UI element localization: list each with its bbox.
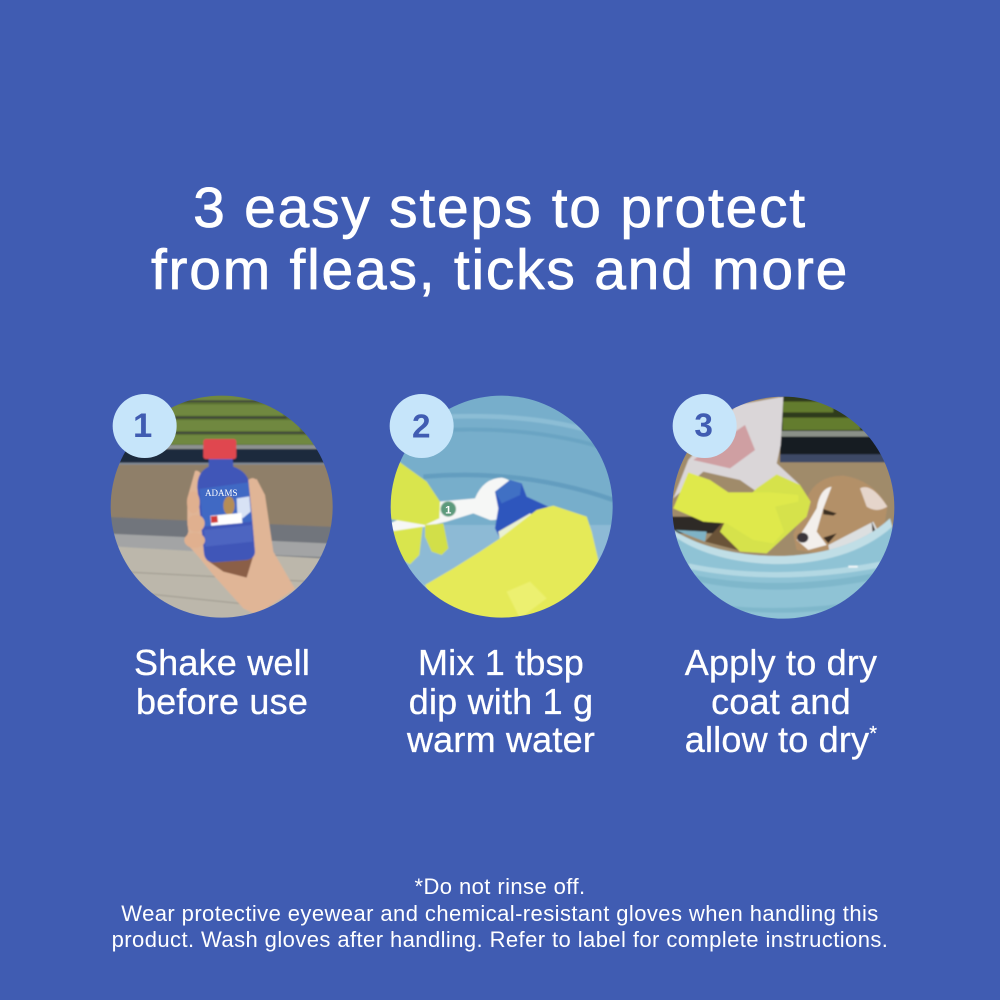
deck [111, 516, 331, 559]
step 2 caption: dip with 1 g [409, 680, 593, 722]
number badge 3: 3 [694, 408, 713, 445]
step 3 caption: Apply to dry [685, 642, 877, 683]
number badge 1 [113, 394, 177, 458]
number badge 1: 1 [133, 407, 152, 445]
number badge 2: 2 [412, 408, 431, 445]
bottle neck [495, 480, 548, 538]
title: from fleas, ticks and more [151, 238, 849, 302]
panel: step 2 photo [390, 394, 613, 618]
sponge [720, 474, 811, 553]
footnote: product. Wash gloves after handling. Refer to label for complete instructions. [112, 927, 888, 952]
step 3 caption: coat and [711, 680, 851, 722]
scoop [390, 478, 514, 534]
foliage [171, 396, 314, 445]
step 1 caption [134, 642, 310, 722]
panel: step 1 photo [110, 394, 333, 618]
panel: step 3 photo [672, 394, 894, 619]
title [151, 176, 849, 302]
right glove [425, 506, 598, 625]
left glove [390, 462, 440, 525]
number badge 3 [673, 394, 737, 458]
step 2 caption: warm water [407, 719, 595, 760]
label text: ADAMS [205, 488, 237, 498]
bottle [197, 458, 255, 562]
glove [673, 472, 798, 543]
footnote: Wear protective eyewear and chemical-resistant gloves when handling this [121, 900, 879, 926]
title: 3 easy steps to protect [193, 176, 807, 240]
number badge 2 [390, 394, 454, 458]
step 3 caption: allow to dry* [685, 719, 877, 760]
dark rim [670, 517, 733, 533]
step 2 caption: Mix 1 tbsp [418, 642, 584, 683]
foliage [780, 396, 864, 432]
step 3 caption [684, 642, 878, 760]
footnote [112, 874, 888, 952]
tub [675, 526, 892, 619]
step images and number badges [110, 394, 894, 619]
panel: step 2 photo: 1 [445, 504, 451, 516]
footnote: *Do not rinse off. [414, 874, 586, 899]
wall [110, 464, 333, 528]
fingers [187, 515, 205, 532]
step 1 caption: before use [136, 680, 308, 722]
person [673, 397, 800, 498]
hand [185, 471, 295, 615]
step 1 caption: Shake well [134, 642, 310, 683]
dog [793, 476, 887, 555]
step 2 caption [406, 642, 595, 760]
